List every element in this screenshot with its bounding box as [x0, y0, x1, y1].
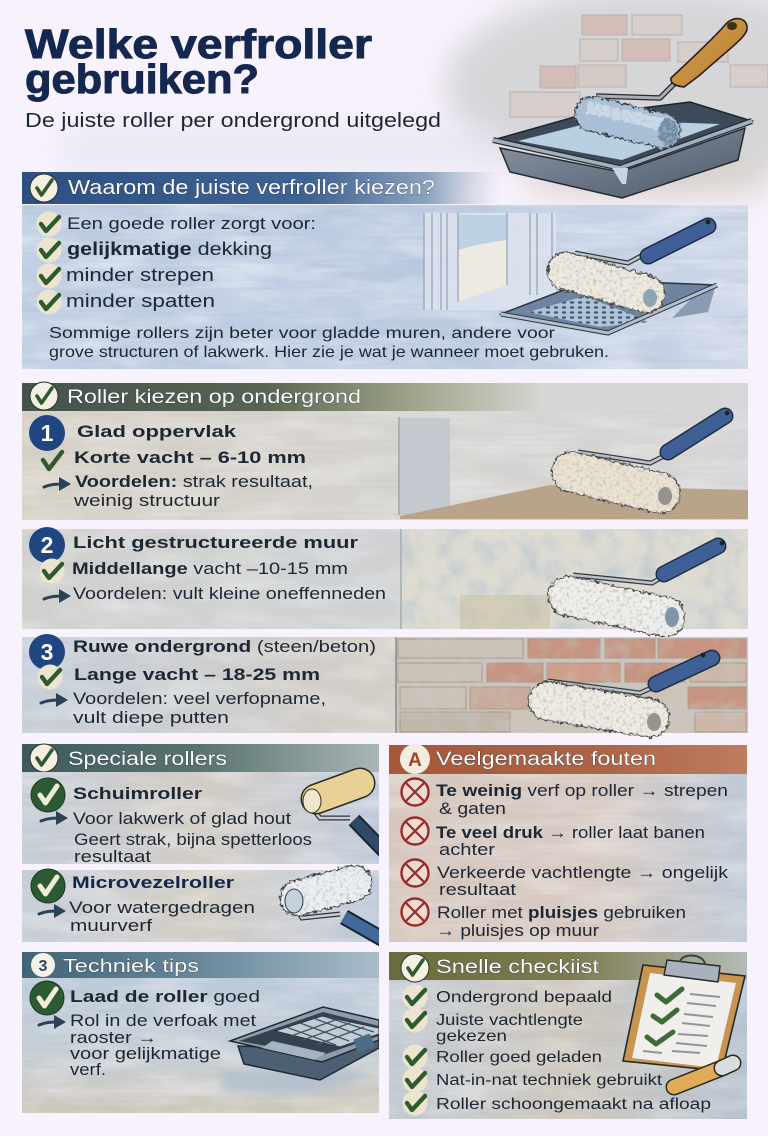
- badge 1: 1: [41, 420, 54, 446]
- section header: Speciale rollers: [68, 749, 227, 770]
- text: Licht gestructureerde muur: [73, 533, 358, 552]
- list: benefits: Een goede roller zorgt voor:: [67, 214, 316, 233]
- text: verf.: [70, 1061, 106, 1079]
- wall and floor illustration: [399, 417, 748, 519]
- subtitle: De juiste roller per ondergrond uitgelegd: [25, 110, 441, 132]
- badge 3: [29, 634, 65, 670]
- hero illustration: brick wall, tray and roller: [60, 0, 768, 198]
- tray with grid illustration: [222, 1007, 379, 1094]
- list: mistakes: Verkeerde vachtlengte → ongelijk: [437, 864, 729, 882]
- section header: [389, 744, 747, 774]
- list: benefits: gelijkmatige dekking: [67, 239, 272, 259]
- text: Voordelen: veel verfopname,: [73, 690, 326, 708]
- text: Korte vacht – 6-10 mm: [74, 448, 306, 467]
- list: checklist: Ondergrond bepaald: [436, 989, 612, 1006]
- list: checklist: Roller schoongemaakt na afloap: [436, 1096, 711, 1113]
- row 3: ruwe ondergrond: [22, 634, 748, 733]
- text: Voor watergedragen: [69, 898, 255, 917]
- panel: speciale rollers: [22, 744, 386, 942]
- row 1: glad oppervlak: [22, 411, 748, 520]
- list: benefits: minder spatten: [66, 291, 215, 311]
- text: [43, 422, 313, 510]
- text: Schuimroller: [73, 784, 202, 803]
- foam roller illustration: [303, 783, 385, 852]
- panel: snelle checklist: [389, 952, 747, 1119]
- list: mistakes: resultaat: [439, 881, 516, 899]
- panel: techniek tips: [22, 952, 379, 1113]
- title: [25, 21, 372, 102]
- roller illustration: [548, 653, 712, 731]
- panel body: [22, 205, 748, 369]
- list: checklist: gekezen: [436, 1028, 507, 1045]
- window illustration: [424, 213, 556, 310]
- section header: [22, 744, 379, 772]
- badge 2: 2: [41, 532, 53, 558]
- text: Voordelen: vult kleine oneffenneden: [73, 585, 386, 603]
- intro paragraph: Sommige rollers zijn beter voor gladde muren, andere voor: [49, 325, 556, 342]
- list: checklist: Nat-in-nat techniek gebruikt: [436, 1072, 663, 1089]
- list: checklist: [402, 984, 711, 1116]
- section header: [22, 952, 379, 978]
- microfibre roller illustration: [285, 883, 386, 941]
- list: benefits: [36, 212, 316, 314]
- text: Rol in de verfoak met: [70, 1012, 256, 1030]
- list: mistakes: Te veel druk → roller laat banen: [436, 824, 705, 842]
- section header: [22, 382, 748, 411]
- clipboard illustration: [623, 956, 745, 1071]
- text: [40, 533, 386, 603]
- section header: [389, 952, 747, 982]
- text: [38, 637, 376, 727]
- card: microvezelroller: [22, 869, 386, 942]
- list: mistakes: achter: [439, 841, 496, 859]
- section header: Veelgemaakte fouten: [436, 748, 656, 770]
- section header: Techniek tips: [63, 955, 199, 976]
- text: Microvezelroller: [72, 873, 234, 892]
- roller illustration: [572, 411, 729, 505]
- section header: A: [408, 750, 422, 771]
- card: schuimroller: [22, 772, 385, 866]
- text: Voor lakwerk of glad hout: [73, 810, 291, 828]
- title: gebruiken?: [25, 56, 259, 102]
- section header: Snelle checkiist: [436, 956, 600, 978]
- text: Laad de roller goed: [70, 987, 260, 1006]
- roller and tray illustration: [501, 220, 717, 333]
- text: muurverf: [70, 916, 152, 935]
- text: Ruwe ondergrond (steen/beton): [73, 637, 376, 656]
- section header: Roller kiezen op ondergrond: [67, 387, 361, 408]
- list: mistakes: → pluisjes op muur: [436, 922, 600, 940]
- list: mistakes: & gaten: [439, 800, 506, 818]
- badge 2: [29, 527, 65, 563]
- list: mistakes: Te weinig verf op roller → strepen: [436, 782, 728, 800]
- intro paragraph: [49, 325, 609, 361]
- text: Glad oppervlak: [77, 422, 237, 441]
- text: Lange vacht – 18-25 mm: [74, 665, 320, 684]
- section header: 3: [39, 958, 48, 975]
- list: checklist: Roller goed geladen: [436, 1049, 602, 1066]
- section header: Waarom de juiste verfroller kiezen?: [68, 177, 435, 199]
- text: vult diepe putten: [73, 709, 229, 727]
- paint covered roller: [592, 108, 678, 145]
- text: Voordelen: strak resultaat,: [75, 473, 313, 491]
- intro paragraph: grove structuren of lakwerk. Hier zie je wat je wanneer moet gebruken.: [49, 344, 609, 361]
- text: [31, 778, 312, 866]
- text: Geert strak, bijna spetterloos: [74, 831, 312, 849]
- text: [31, 869, 255, 935]
- wire and wooden handle: [596, 19, 747, 98]
- plaster wall illustration: [401, 529, 748, 629]
- row 2: licht gestructureerde muur: [22, 527, 748, 629]
- text: [30, 981, 260, 1079]
- list: mistakes: [402, 778, 729, 940]
- panel: waarom: [22, 172, 748, 369]
- text: raoster →: [70, 1029, 157, 1047]
- list: mistakes: Roller met pluisjes gebruiken: [437, 904, 686, 922]
- roller illustration: [568, 541, 724, 627]
- tray: [493, 102, 752, 198]
- section header: [22, 172, 502, 204]
- panel: veelgemaakte fouten: [389, 744, 747, 942]
- list: benefits: minder strepen: [66, 265, 214, 285]
- list: checklist: Juiste vachtlengte: [436, 1012, 583, 1029]
- title: Welke verfroller: [25, 21, 372, 67]
- marker pen illustration: [674, 1063, 733, 1087]
- badge 3: 3: [41, 639, 53, 665]
- panel: roller kiezen op ondergrond: [22, 382, 748, 733]
- brick wall illustration: [396, 637, 748, 733]
- text: resultaat: [74, 848, 151, 866]
- badge 1: [29, 415, 65, 451]
- text: weinig structuur: [73, 492, 221, 510]
- text: Middellange vacht –10-15 mm: [72, 559, 348, 578]
- text: voor gelijkmatige: [70, 1045, 221, 1063]
